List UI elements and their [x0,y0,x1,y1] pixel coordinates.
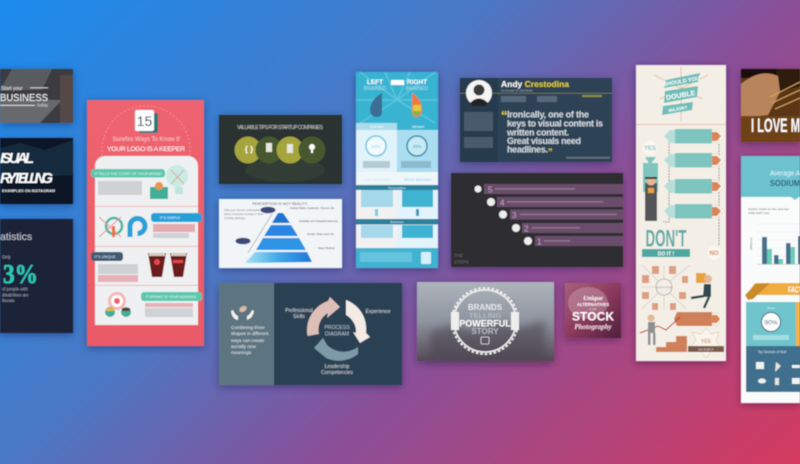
banner heading: DOUBLE [666,90,696,102]
card: left right brained: RIGHT BRAINED [404,178,432,182]
heading: LEFT [367,79,383,86]
card: Andy Crestodina quote: Co-Founder Of Orbit Media [501,88,533,92]
card: statistics: atistics [0,231,32,243]
card: valuable tips: VALUABLE TIPS FOR STARTUP COMPANIES [237,125,324,131]
badge: BRANDS [468,303,503,312]
quote: “ [501,108,508,123]
section 2: IT'S SIMPLE [160,216,181,220]
card: start your business: today [37,102,49,108]
section 1 [91,165,188,199]
bio [464,112,493,131]
card: pyramid [219,199,342,268]
card: unique stock photography [565,283,621,338]
yes graduate: YES [644,146,656,152]
banner heading: SHOULD YOU [663,76,700,88]
yes graduate [642,140,658,221]
don't do it: DO IT ! [658,252,675,258]
side text: socially new [231,344,256,349]
step 2: 2 [524,224,529,234]
card: process diagram: Experience [365,309,391,315]
card: double major infographic [636,65,726,361]
card: unique stock photography: Photography [574,323,613,331]
content panel [95,156,198,325]
step 3: 3 [512,211,517,220]
card: left right brained: 60% [371,144,381,149]
card: brands powerful story [417,282,554,361]
card: left right brained [356,72,438,268]
yes badge: GO FOR IT [698,348,714,352]
card: the steps: STEPS [454,260,469,264]
step 4: 4 [500,198,505,208]
number badge: 15 [137,113,152,129]
section 4: IT SPEAKS TO YOUR AUDIENCE [146,295,197,299]
stat tile [746,302,800,346]
badge: POWERFUL [459,318,511,328]
step 5: 5 [488,186,493,194]
card: process diagram: Competencies [321,370,353,376]
stat tile: About [767,306,775,310]
pyramid [245,213,312,263]
card: process diagram: Skills [293,314,305,320]
wheel of icons: DON'T STOP [656,286,673,290]
card: statistics: 3% [3,259,38,289]
card: process diagram [219,283,402,385]
section 3 [91,252,187,282]
no: NO [710,251,719,257]
heading: RIGHT [407,79,427,86]
card: unique stock photography: STOCK [572,310,614,324]
section headers: LEFT BRAINED [364,178,390,182]
card: left right brained: 40% [412,144,422,149]
top sources panel: Top Sources of Sodi [758,350,787,354]
running man [691,273,712,308]
heading [364,79,428,92]
yes badge [688,328,724,358]
step 1 [524,236,623,246]
card: the steps: THE [454,253,463,258]
side text: Combining three [231,325,265,330]
side text: shapes in different [231,331,269,336]
card: pyramid: PERCEPTION IS NOT REALITY [252,202,308,206]
card: unique stock photography: Unique [583,295,603,302]
brains [370,93,422,117]
name: Andy Crestodina [501,79,569,89]
card: unique stock photography: ALTERNATIVES [577,302,609,307]
card: unique stock photography: FOR [589,308,597,312]
heading: Surefire Ways To Know If [112,137,180,143]
card: process diagram: Leadership [325,364,350,370]
card: visual storytelling: RYTELLING [0,170,53,187]
card: pyramid: monthly package. [224,216,246,220]
card: statistics: of people with [2,286,29,292]
quote: Great visuals need [507,136,581,146]
badge: TELLING [469,311,501,320]
no [707,246,721,260]
section 1: IT TELLS THE STORY OF YOUR BRAND [94,172,162,176]
card: pyramid: Global Affairs, Academic, Donors, Etc. [290,206,336,210]
card: left right brained: Personalities [388,186,406,190]
heading: YOUR LOGO IS A KEEPER [107,146,185,153]
card: visual storytelling [0,138,73,204]
don't do it [642,226,690,258]
stairs [640,314,687,352]
columns [356,123,397,130]
side text: meanings. [231,350,252,355]
card: statistics: Only [2,254,12,260]
bar chart [749,224,800,265]
banner heading [654,67,708,121]
quote: headlines. [507,145,548,155]
subtitle: 1999-2000 Cars [748,211,770,215]
step 2 [512,223,623,234]
card: pyramid: Help your donors understand [224,208,261,212]
card: pyramid: Major Medical [318,246,335,250]
quote [501,108,603,157]
section 2 [99,213,202,238]
side text [231,325,269,355]
card: logo keeper infographic [87,100,204,346]
card: left right brained: Behaviors [390,220,404,224]
card: pyramid: where financial increase in their [224,212,263,216]
collage of template cards [0,65,800,403]
side text: ways can create [231,338,265,343]
four circles: { } [245,145,253,154]
card: start your business: BUSINESS [0,93,48,104]
card: Andy Crestodina quote [460,78,612,162]
card: process diagram: PROCESS [324,325,350,331]
quote: keys to visual content is [507,119,603,129]
heading: BRAINED [364,86,386,92]
card: left right brained: Introvert [412,125,424,129]
don't do it: DON'T [646,226,687,252]
quote: written content. [506,127,569,137]
card: start your business: Start your [1,86,23,92]
step 3 [499,210,623,220]
subtitle: Sodium intake by Sex and Age [748,207,789,211]
top sources panel [746,346,800,392]
bar chart: Milligrams [749,237,753,250]
wheel of icons [641,265,690,310]
stat tile: 90% [764,320,778,326]
flow boxes [663,129,724,245]
card: process diagram: DIAGRAM [325,332,349,338]
card: visual storytelling: ISUAL [0,150,34,167]
heading [770,170,800,188]
card: statistics [0,219,73,333]
card: statistics: disabilities are [2,292,29,298]
step 5 [474,184,623,194]
card: pyramid: Disability and Hospital Indemnity [299,219,338,223]
step 4 [487,197,623,208]
badge: STORY [471,327,499,336]
icon: hands and leaves [231,305,254,320]
number badge [135,110,158,133]
cycle arrows [307,297,370,361]
heading: BRAINED [406,86,428,92]
yes badge: YES [701,339,712,345]
card: process diagram: Professional [285,308,313,314]
card: statistics: literate [2,298,15,303]
quote: Ironically, one of the [507,110,589,120]
portrait [466,80,492,106]
section 3: IT'S UNIQUE [94,255,116,259]
facts ribbon [745,283,800,300]
banner heading: MAJOR? [668,105,688,113]
section 4 [105,292,202,317]
badge [451,288,519,354]
card: left right brained: Extrovert [370,125,384,129]
card: sodium infographic [741,156,800,403]
orange box [674,312,724,326]
card: valuable tips [219,115,342,184]
heading [107,137,185,153]
subtitle [748,207,789,215]
card: pyramid: Dental, Vision and Life [307,232,334,236]
card: visual storytelling: EXAMPLES ON INSTAGRAM [2,188,55,193]
card: start your business [0,69,73,123]
card: the steps [451,173,623,267]
quote: ” [548,147,552,157]
card: guitar meme [741,69,800,142]
step 1: 1 [537,238,542,246]
